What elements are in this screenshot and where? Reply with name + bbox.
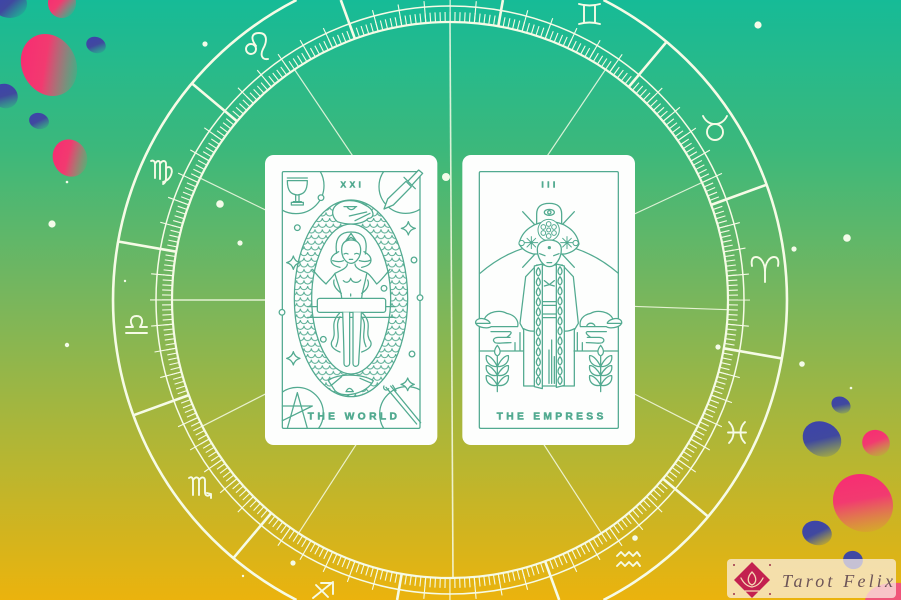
card frame xyxy=(282,172,420,428)
card number: XXI xyxy=(340,179,364,189)
house dividers xyxy=(118,0,782,600)
icon: aquarius xyxy=(617,552,640,566)
altar bar xyxy=(308,307,395,317)
tarot card: The Empress xyxy=(462,155,635,445)
figure: dancer xyxy=(308,232,395,366)
legs xyxy=(343,312,361,366)
zodiac symbols xyxy=(126,4,778,598)
left cluster of coloured blobs xyxy=(0,0,108,182)
empress head xyxy=(537,240,561,267)
card base xyxy=(265,155,437,445)
serpent ring xyxy=(294,200,408,397)
degree scale ring xyxy=(156,6,744,594)
inner spokes xyxy=(172,22,728,578)
outer ring xyxy=(113,0,787,600)
icon: libra xyxy=(126,316,147,333)
right bonsai tree xyxy=(574,311,622,351)
robe xyxy=(520,265,578,386)
card base xyxy=(462,155,635,445)
icon: taurus xyxy=(703,116,727,140)
card number: III xyxy=(541,179,559,189)
astrological wheel xyxy=(113,0,787,600)
small orbs xyxy=(279,195,423,357)
headdress halo xyxy=(519,222,579,254)
serpent tail xyxy=(328,375,373,395)
card title: THE WORLD xyxy=(308,412,398,423)
right plant xyxy=(590,345,612,392)
headdress flowers xyxy=(519,219,578,249)
torso and arms xyxy=(313,264,390,298)
left plant xyxy=(486,345,508,392)
icon: lotus diamond xyxy=(733,562,771,598)
tarot card: The World xyxy=(265,155,437,445)
icon: wand xyxy=(384,385,421,424)
icon: cup xyxy=(287,178,307,205)
logo plate xyxy=(727,559,896,598)
icon: virgo xyxy=(151,161,172,184)
icon: sagittarius xyxy=(313,582,333,598)
logo badge xyxy=(727,559,896,598)
icon: pisces xyxy=(728,422,746,443)
serpent head xyxy=(333,201,373,224)
icon: sword xyxy=(384,170,423,209)
crossed hair pins xyxy=(523,212,574,267)
third eye dome xyxy=(537,203,562,225)
icon: gemini xyxy=(579,4,600,24)
icon: scorpio xyxy=(189,477,211,498)
icon: pentagram xyxy=(282,393,312,428)
icon: leo xyxy=(246,33,268,59)
sparkle stars xyxy=(287,222,415,391)
icon: aries xyxy=(752,257,778,282)
corner emblem circles xyxy=(282,172,420,428)
face xyxy=(342,233,361,263)
hills xyxy=(480,248,618,273)
card frame xyxy=(479,172,618,428)
logo wordmark: Tarot Felix xyxy=(782,571,893,591)
left bonsai tree xyxy=(476,311,523,351)
hair xyxy=(331,232,371,352)
right cluster of coloured blobs xyxy=(796,393,901,600)
robe panels xyxy=(534,264,564,389)
card title: THE EMPRESS xyxy=(497,412,603,423)
